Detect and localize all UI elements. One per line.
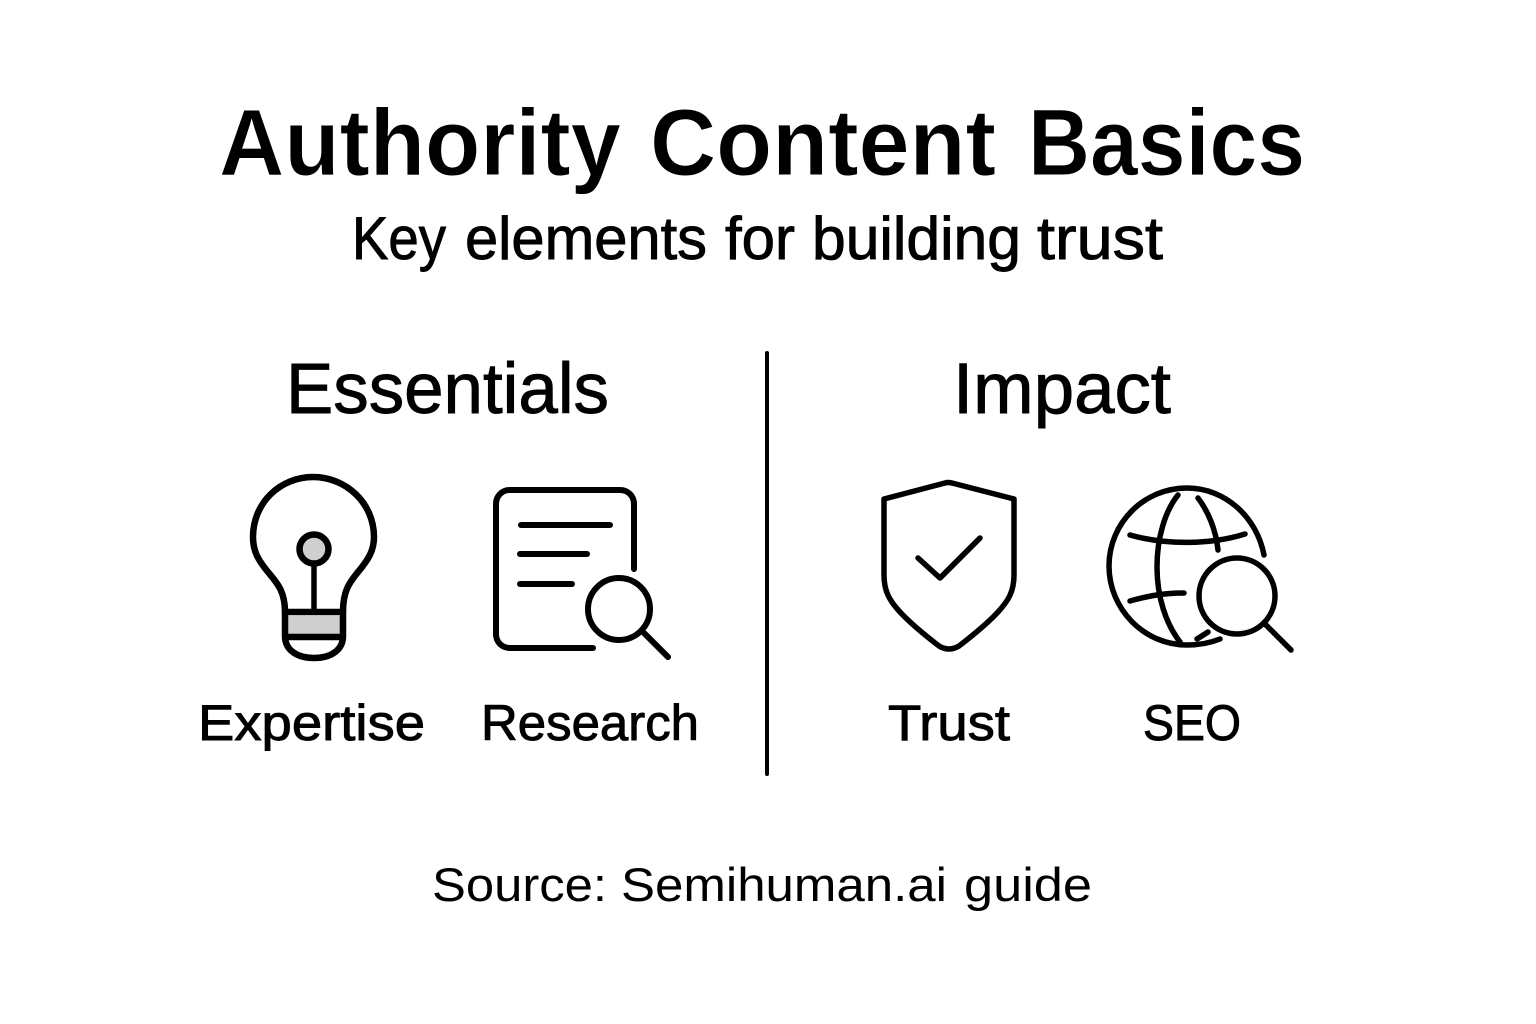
heading: essentials: Essentials: [286, 350, 609, 429]
subtitle: for: [725, 205, 795, 272]
subtitle: elements: [465, 205, 707, 272]
title: Content: [650, 90, 996, 196]
icon: light bulb: [253, 477, 374, 658]
title: Basics: [1028, 90, 1305, 196]
label: expertise: Expertise: [198, 695, 425, 751]
title: Authority: [219, 90, 621, 196]
label: trust: Trust: [888, 695, 1010, 751]
icon: shield with check: [884, 482, 1014, 649]
subtitle: building: [812, 205, 1021, 272]
heading: impact: Impact: [953, 350, 1171, 429]
center divider: [765, 353, 769, 774]
source note: Semihuman.ai: [621, 858, 947, 911]
panel: essentials: [198, 350, 699, 751]
source note: guide: [964, 858, 1092, 911]
icon: globe with magnifier: [1109, 488, 1291, 650]
subtitle: trust: [1037, 205, 1163, 272]
label: research: Research: [481, 695, 699, 751]
source note: Source:: [432, 858, 607, 911]
label: seo: SEO: [1143, 695, 1241, 751]
panel: impact: [884, 350, 1291, 751]
subtitle: Key: [352, 205, 446, 272]
icon: document with magnifier: [496, 490, 668, 657]
